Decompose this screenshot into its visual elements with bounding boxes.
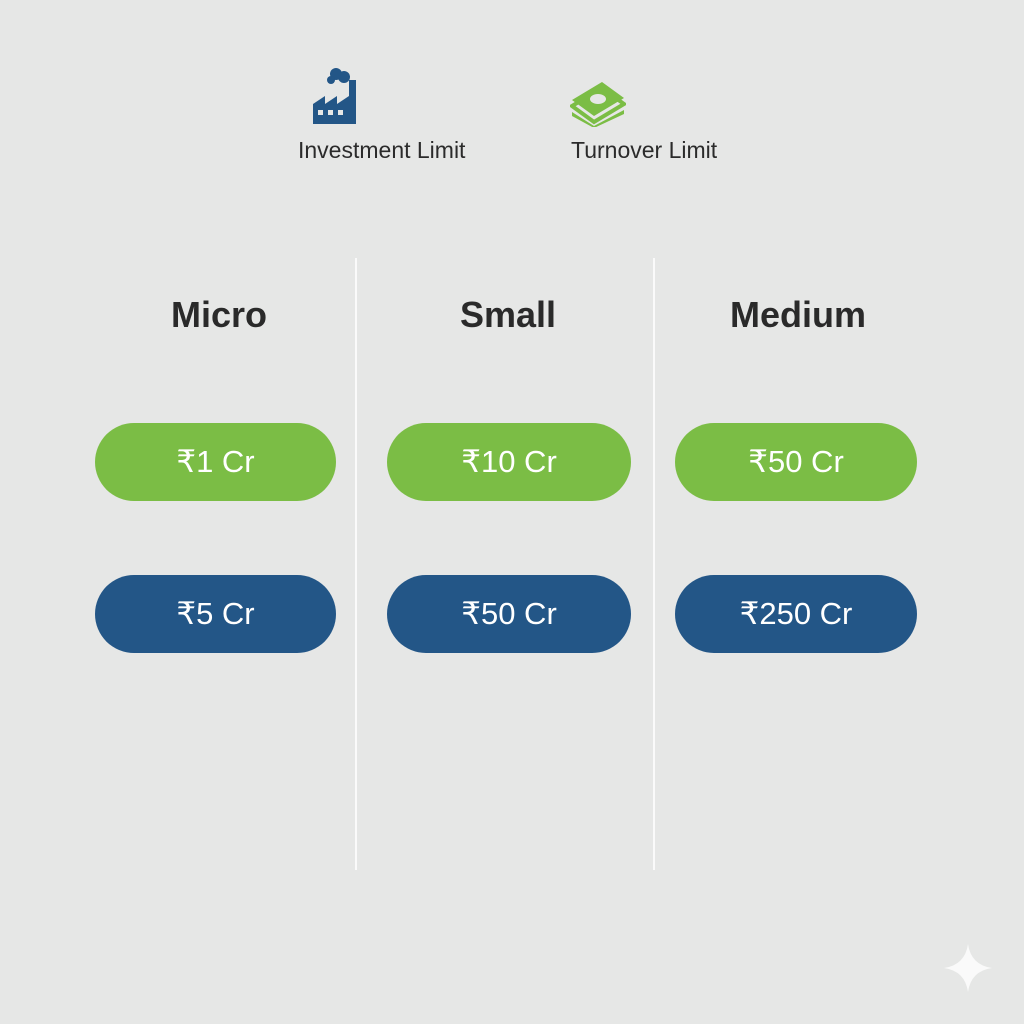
icon: sparkle <box>945 945 991 991</box>
pill: small investment <box>387 423 631 501</box>
heading: micro: Micro <box>171 294 267 335</box>
pill: small investment: ₹10 Cr <box>461 444 557 479</box>
pill: micro investment <box>95 423 336 501</box>
label: investment limit: Investment Limit <box>298 137 465 163</box>
pill: medium turnover <box>675 575 917 653</box>
pill: medium investment <box>675 423 917 501</box>
icon: money stack <box>570 82 626 127</box>
pill: medium investment: ₹50 Cr <box>748 444 844 479</box>
pill: micro turnover <box>95 575 336 653</box>
pill: micro turnover: ₹5 Cr <box>176 596 255 631</box>
label: turnover limit: Turnover Limit <box>571 137 717 163</box>
pill: small turnover: ₹50 Cr <box>461 596 557 631</box>
pill: small turnover <box>387 575 631 653</box>
heading: medium: Medium <box>730 294 866 335</box>
pill: medium turnover: ₹250 Cr <box>740 596 852 631</box>
pill: micro investment: ₹1 Cr <box>176 444 255 479</box>
heading: small: Small <box>460 294 556 335</box>
icon: factory <box>313 68 356 124</box>
